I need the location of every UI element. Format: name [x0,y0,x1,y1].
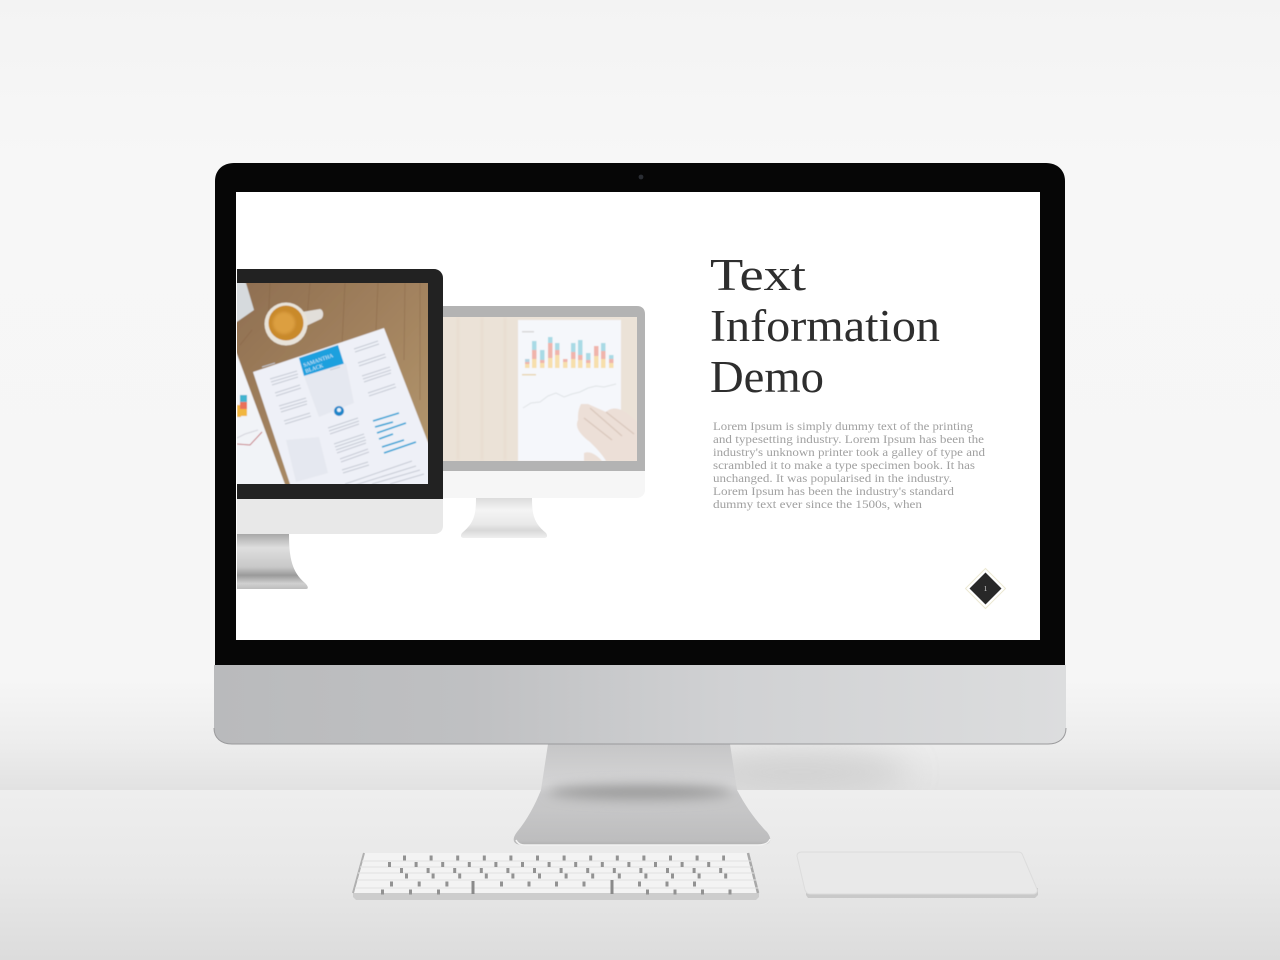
title [710,250,940,402]
front monitor photo: resume on desk: BLACK [305,363,324,375]
resume profile icon [334,406,344,416]
body text: unchanged. It was popularised in the industry. [713,473,952,485]
body text: dummy text ever since the 1500s, when [713,499,922,511]
keyboard key gaps [381,858,735,892]
monitor chin [214,665,1066,744]
laptop corner [237,283,255,323]
resume blue header [299,345,344,376]
rear monitor frame [443,306,645,471]
hand [577,404,640,461]
body text: Lorem Ipsum has been the industry's standard [713,486,954,498]
title: Information [710,301,940,351]
bar chart [522,331,614,376]
body text: Lorem Ipsum is simply dummy text of the printing [713,421,973,433]
title: Text [710,250,807,300]
front monitor frame [237,269,443,499]
resume text lines [262,341,424,486]
resume skill bars [373,413,416,453]
keyboard key rows [355,861,758,888]
coffee cup [264,302,323,346]
monitor bezel [215,163,1065,665]
monitor chin edge [214,728,1066,744]
monitor stand [514,744,770,845]
page number badge [966,568,1006,608]
body text [713,421,985,511]
body text: industry's unknown printer took a galley of type and [713,447,985,459]
title: Demo [710,352,824,402]
webcam [639,175,643,179]
body text: scrambled it to make a type specimen book. It has [713,460,976,472]
front monitor chin [237,499,443,534]
front monitor photo: resume on desk: SAMANTHA [303,353,334,369]
monitor body [214,163,1066,744]
resume paper [253,328,431,487]
front monitor mockup [234,269,443,589]
rear monitor chin [443,471,645,498]
keyboard [353,853,759,900]
left chart paper [237,352,286,484]
rear monitor stand [461,498,547,538]
rear monitor photo: report on desk [440,314,640,464]
rear monitor mockup [440,306,645,538]
trackpad [797,852,1038,898]
line chart [523,384,616,408]
front monitor stand [237,534,308,589]
front monitor photo: resume on desk [234,280,431,487]
resume shaded panels [304,363,354,417]
page number badge: 1 [984,585,988,593]
body text: and typesetting industry. Lorem Ipsum has been the [713,434,984,446]
slide screen [234,192,1040,640]
